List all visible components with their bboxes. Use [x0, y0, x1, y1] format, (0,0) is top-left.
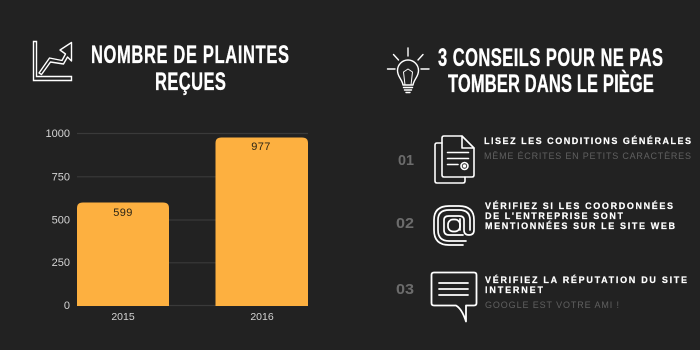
tip 03 text: VÉRIFIEZ LA RÉPUTATION DU SITE [485, 275, 687, 285]
tip 02 text: DE L'ENTREPRISE SONT [485, 211, 624, 221]
bar: 2015 [77, 202, 169, 306]
title: tips: TOMBER DANS LE PIÈGE [448, 68, 654, 98]
tip 01 text [484, 136, 691, 161]
y axis labels: 750 [52, 172, 70, 184]
tip 03 text: GOOGLE EST VOTRE AMI ! [485, 300, 619, 310]
title: complaints: NOMBRE DE PLAINTES [91, 42, 289, 69]
tip 02 text: MENTIONNÉES SUR LE SITE WEB [485, 221, 676, 231]
x axis labels [111, 311, 274, 323]
tip 03 text: INTERNET [485, 285, 544, 295]
icon: speech bubble [432, 272, 476, 322]
bar: 2016 [216, 138, 308, 306]
icon: rising chart [34, 42, 72, 80]
icon: documents [435, 136, 474, 183]
title: tips [438, 45, 663, 98]
number 01: 01 [398, 152, 414, 169]
bar: 2016: 977 [251, 141, 271, 153]
tip 02 text [485, 201, 676, 231]
y axis labels [46, 128, 70, 312]
tip 01 [398, 136, 691, 183]
title: complaints: REÇUES [155, 69, 226, 96]
y axis labels: 500 [52, 214, 70, 226]
y axis labels: 250 [52, 257, 70, 269]
tip 03 [396, 272, 687, 322]
bar chart: complaints per year [46, 128, 308, 323]
number 02: 02 [396, 215, 414, 232]
icon: light bulb [388, 48, 429, 92]
tip 02 [396, 201, 676, 245]
tip 01 text: MÊME ÉCRITES EN PETITS CARACTÈRES [484, 151, 691, 161]
tip 02 text: VÉRIFIEZ SI LES COORDONNÉES [485, 201, 673, 211]
x axis labels: 2015 [111, 311, 135, 323]
number 03: 03 [396, 281, 414, 298]
bar: 2015: 599 [113, 207, 133, 219]
icon: at sign [434, 206, 474, 245]
y axis labels: 1000 [46, 128, 70, 140]
title: tips: 3 CONSEILS POUR NE PAS [438, 45, 663, 72]
tip 03 text [485, 275, 687, 310]
y axis labels: 0 [64, 300, 70, 312]
title: complaints [91, 42, 289, 96]
x axis labels: 2016 [250, 311, 274, 323]
tip 01 text: LISEZ LES CONDITIONS GÉNÉRALES [484, 136, 691, 146]
